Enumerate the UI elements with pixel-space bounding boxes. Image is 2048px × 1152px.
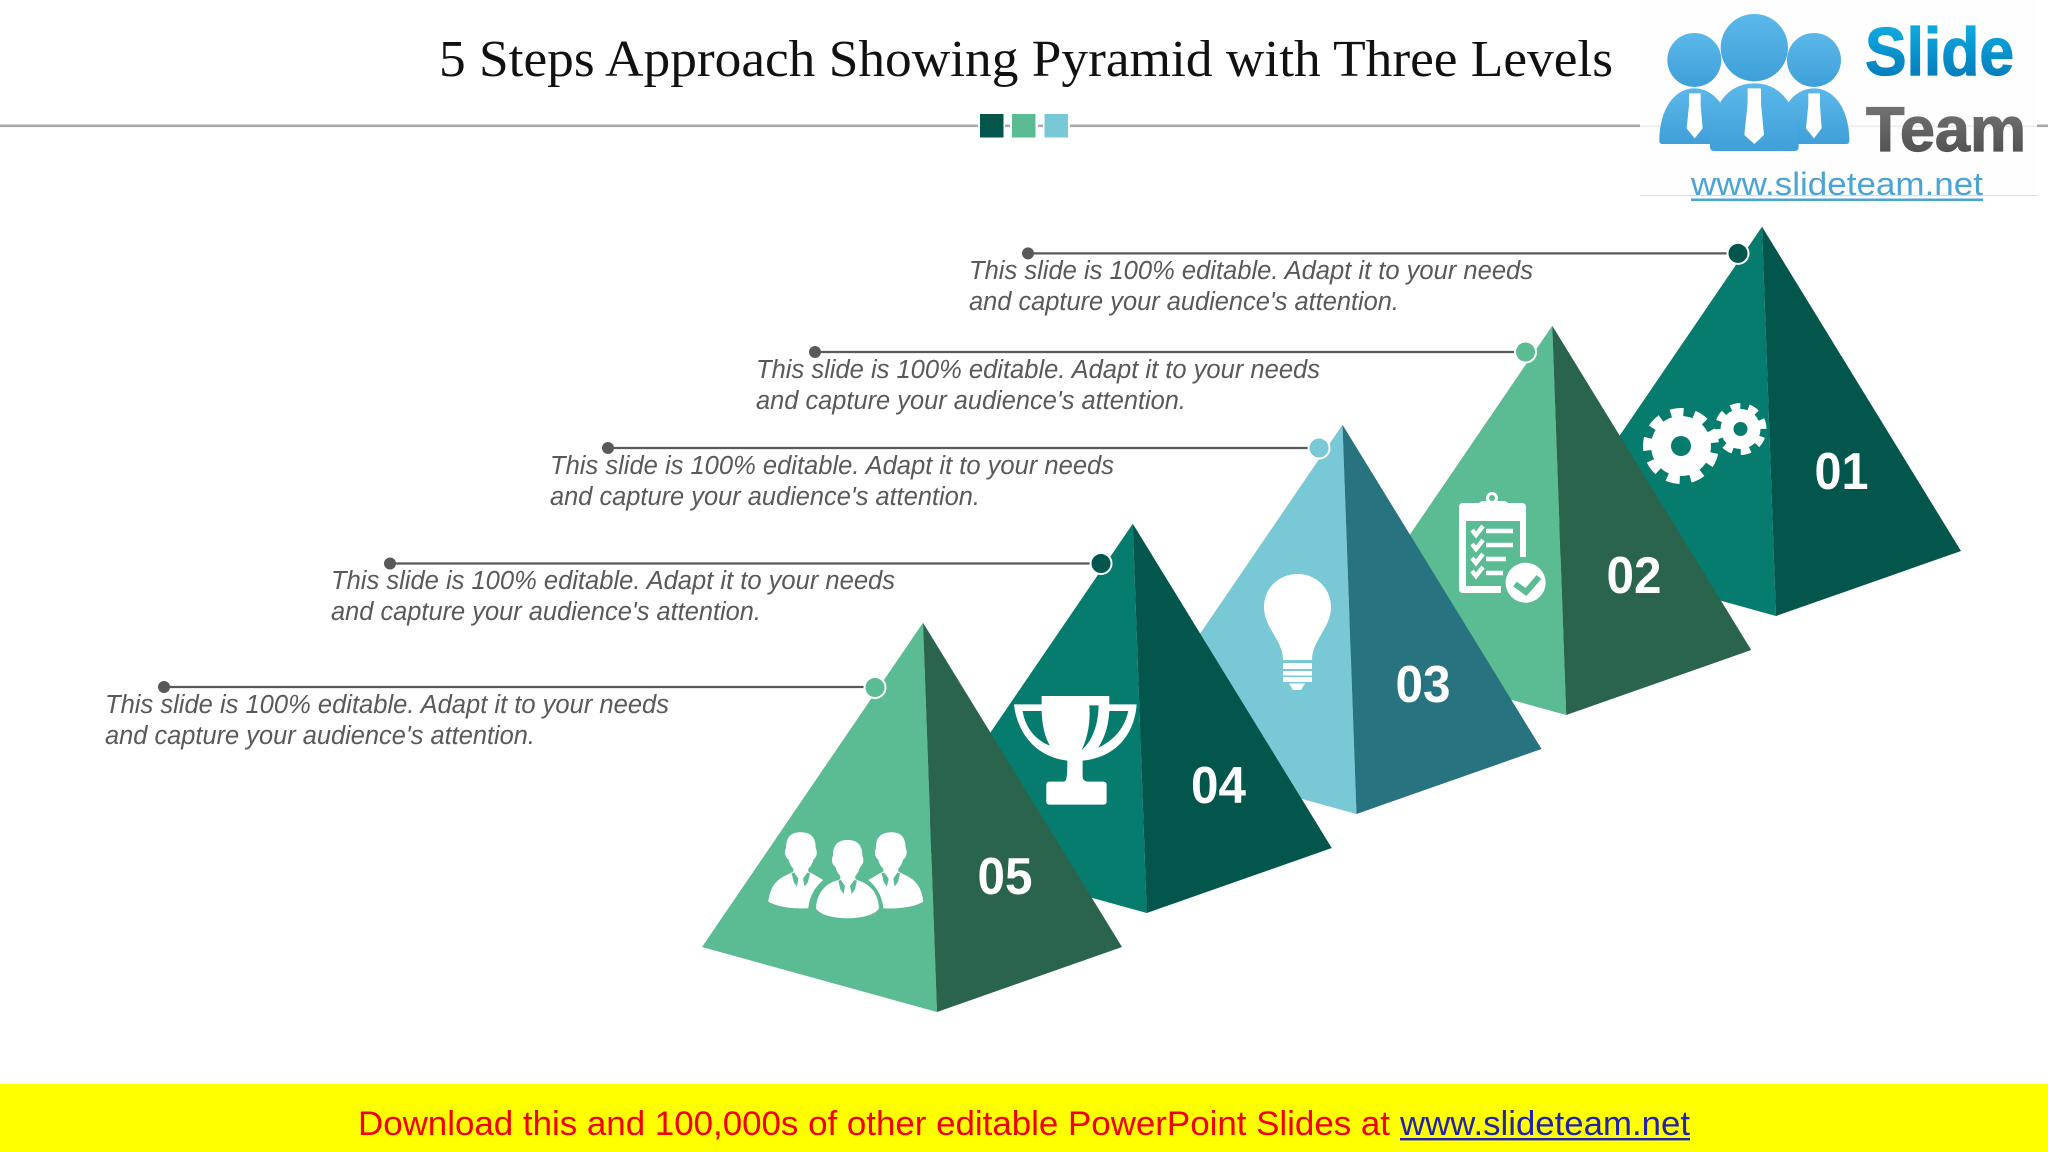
icon: trophy <box>1014 696 1137 805</box>
icon: gears <box>1642 400 1769 485</box>
callout 05 text: This slide is 100% editable. Adapt it to your needs <box>105 691 669 719</box>
title: 5 Steps Approach Showing Pyramid with Three Levels <box>439 31 1613 88</box>
number 03: 03 <box>1396 656 1450 714</box>
icon: three business people <box>768 832 923 918</box>
callout 01 text: and capture your audience's attention. <box>969 288 1399 316</box>
header rule with colour squares <box>0 114 2048 138</box>
callout 02 text: and capture your audience's attention. <box>756 387 1186 415</box>
pyramid 05 <box>702 623 1122 1012</box>
callout 03 text: and capture your audience's attention. <box>550 483 980 511</box>
callout 03 text: This slide is 100% editable. Adapt it to your needs <box>550 452 1114 480</box>
number 01: 01 <box>1814 443 1868 501</box>
callout 04 text: and capture your audience's attention. <box>331 598 761 626</box>
logo: SlideTeam <box>1640 0 2037 202</box>
pyramid 04 <box>912 524 1332 913</box>
pyramid 03 <box>1122 425 1542 814</box>
footer link: www.slideteam.net <box>1399 1105 1691 1143</box>
callout 04 text: This slide is 100% editable. Adapt it to your needs <box>331 567 895 595</box>
number 04: 04 <box>1191 757 1246 815</box>
callout 05 text: and capture your audience's attention. <box>105 722 535 750</box>
number 05: 05 <box>978 848 1032 906</box>
callout 02 text: This slide is 100% editable. Adapt it to your needs <box>756 356 1320 384</box>
pyramid 01 <box>1541 227 1961 616</box>
callout 01 <box>969 243 1748 316</box>
callout 02 <box>756 342 1536 415</box>
footer text: Download this and 100,000s of other editable PowerPoint Slides at <box>358 1105 1391 1143</box>
pyramid 02 <box>1331 326 1751 715</box>
logo word: Slide: Slide <box>1865 14 2014 90</box>
footer banner <box>0 1084 2048 1152</box>
callout 04 <box>331 553 1112 626</box>
callout 05 <box>105 677 886 750</box>
logo word: Team: Team <box>1866 95 2026 165</box>
number 02: 02 <box>1606 547 1662 605</box>
icon: light bulb <box>1264 574 1331 690</box>
logo url: www.slideteam.net <box>1690 166 1983 202</box>
icon: clipboard with checklist <box>1459 494 1546 603</box>
callout 03 <box>550 438 1330 511</box>
callout 01 text: This slide is 100% editable. Adapt it to your needs <box>969 257 1533 285</box>
logo people icon <box>1659 14 1849 151</box>
